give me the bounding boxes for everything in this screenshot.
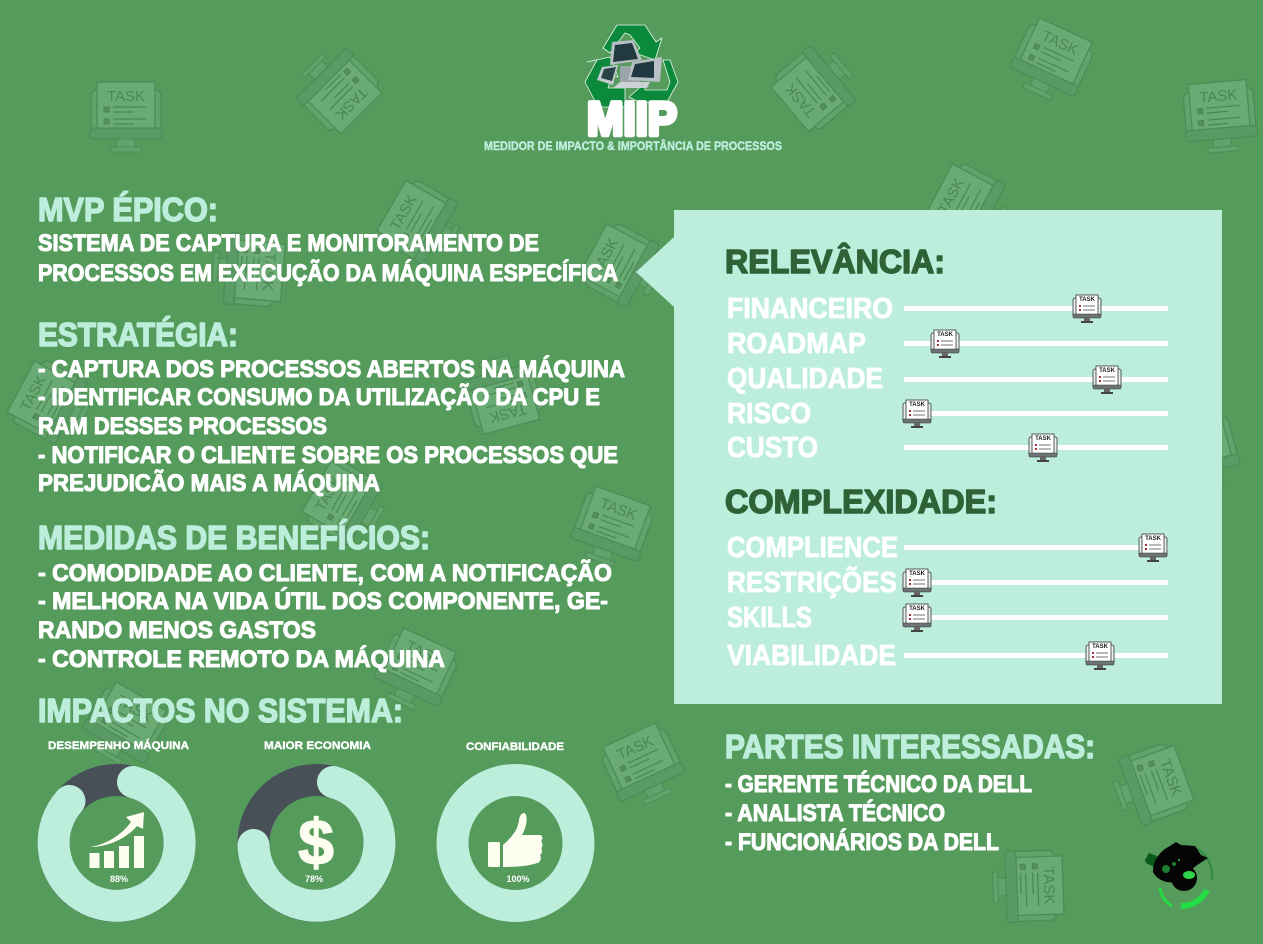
slider: custo: CUSTO [727, 432, 818, 464]
body text: - IDENTIFICAR CONSUMO DA UTILIZAÇÃO DA CPU E [38, 383, 600, 411]
slider: complience: COMPLIENCE [727, 532, 898, 564]
slider: financeiro [727, 293, 1168, 325]
slider: risco: TASK [909, 402, 926, 408]
background task icons: TASK [387, 192, 421, 233]
background task icons: TASK [614, 732, 656, 764]
background task icons: TASK [17, 373, 50, 414]
subtitle: MEDIDOR DE IMPACTO & IMPORTÂNCIA DE PROCESSOS [484, 138, 782, 153]
body text: PROCESSOS EM EXECUÇÃO DA MÁQUINA ESPECÍFICA [38, 259, 618, 287]
slider: complience [727, 532, 1168, 564]
slider: restrições [727, 565, 1168, 599]
ring [254, 780, 380, 906]
recycling arrows [585, 25, 678, 107]
panel background with pointer [636, 210, 1222, 704]
slider: custo: TASK [1035, 436, 1052, 442]
background task icons: TASK [487, 400, 528, 426]
value: 100% [506, 874, 530, 884]
body text: - NOTIFICAR O CLIENTE SOBRE OS PROCESSOS QUE [38, 442, 618, 469]
background task icons: TASK [107, 88, 145, 105]
body text [38, 559, 612, 673]
label: CONFIABILIDADE [466, 741, 564, 753]
body text: RANDO MENOS GASTOS [38, 617, 316, 644]
heading: MEDIDAS DE BENEFÍCIOS: [38, 519, 430, 556]
list: - ANALISTA TÉCNICO [725, 799, 945, 827]
value: 88% [110, 874, 128, 884]
slider: viabilidade: TASK [1092, 644, 1109, 650]
background task icons: TASK [258, 252, 279, 291]
icon: growth chart [90, 812, 144, 868]
body text: - CAPTURA DOS PROCESSOS ABERTOS NA MÁQUINA [38, 355, 625, 383]
slider: restrições: RESTRIÇÕES [727, 565, 897, 599]
slider: roadmap [727, 328, 1168, 360]
ring [54, 780, 180, 906]
slider: skills [727, 602, 1168, 634]
wordmark: MIIP [587, 92, 677, 145]
body text: SISTEMA DE CAPTURA E MONITORAMENTO DE [38, 230, 539, 257]
background task icons: TASK [1199, 86, 1238, 107]
background task icons: TASK [1039, 27, 1081, 59]
list: - FUNCIONÁRIOS DA DELL [725, 828, 999, 856]
donut: desempenho máquina [48, 739, 189, 906]
slider: roadmap: TASK [937, 332, 954, 338]
background task icons: TASK [782, 80, 820, 120]
section: partes interessadas [725, 728, 1095, 856]
body text: RAM DESSES PROCESSOS [38, 413, 327, 440]
body text [38, 355, 625, 497]
body text: - COMODIDADE AO CLIENTE, COM A NOTIFICAÇÃO [38, 559, 612, 587]
background task icons: TASK [1156, 757, 1185, 798]
slider: roadmap: ROADMAP [727, 328, 866, 360]
panel: relevância e complexidade [636, 210, 1222, 704]
background task icons: TASK [332, 84, 371, 123]
slider: risco: RISCO [727, 398, 811, 430]
slider: skills: SKILLS [727, 602, 812, 634]
background task icons: TASK [1039, 866, 1058, 905]
background task icons: TASK [403, 637, 445, 669]
icon: gaming mouse logo [1145, 842, 1212, 906]
slider: qualidade: QUALIDADE [727, 363, 883, 395]
slider: qualidade: TASK [1099, 368, 1116, 374]
heading: impactos no sistema: IMPACTOS NO SISTEMA: [38, 692, 403, 729]
label: MAIOR ECONOMIA [264, 740, 371, 752]
body text: - MELHORA NA VIDA ÚTIL DOS COMPONENTE, GE- [38, 587, 608, 615]
heading: MVP ÉPICO: [38, 191, 218, 228]
slider: viabilidade: VIABILIDADE [727, 640, 896, 672]
slider: financeiro: TASK [1079, 297, 1096, 303]
heading: relevância: RELEVÂNCIA: [725, 243, 945, 280]
heading: complexidade: COMPLEXIDADE: [725, 483, 997, 520]
section: estratégia [38, 316, 625, 497]
donut: maior economia [254, 740, 380, 906]
slider: financeiro: FINANCEIRO [727, 293, 893, 325]
slider: qualidade [727, 363, 1168, 395]
devices [597, 40, 662, 88]
logo [484, 25, 782, 153]
background task icons: TASK [935, 176, 968, 217]
body text: - CONTROLE REMOTO DA MÁQUINA [38, 645, 445, 673]
label: DESEMPENHO MÁQUINA [48, 739, 189, 752]
icon: thumbs up [488, 813, 542, 867]
slider: risco [727, 398, 1168, 430]
list [725, 770, 1032, 856]
body text [38, 230, 618, 287]
slider: skills: TASK [909, 606, 926, 612]
section: MVP épico [38, 191, 618, 287]
value: 78% [305, 874, 323, 884]
body text: PREJUDICÃO MAIS A MÁQUINA [38, 469, 380, 497]
background task icons: TASK [598, 495, 639, 524]
donut: confiabilidade [452, 741, 578, 906]
background task icons: TASK [589, 236, 622, 277]
slider: restrições: TASK [909, 571, 926, 577]
background task icons: TASK [312, 473, 346, 514]
slider: complience: TASK [1145, 536, 1162, 542]
slider: viabilidade [727, 640, 1168, 672]
section: medidas de benefícios [38, 519, 612, 673]
icon: dollar: $ [298, 806, 334, 878]
slider: custo [727, 432, 1168, 464]
background task icons: TASK [114, 692, 155, 726]
heading: ESTRATÉGIA: [38, 316, 238, 353]
ring [452, 780, 578, 906]
list: - GERENTE TÉCNICO DA DELL [725, 770, 1032, 798]
background task icons: TASK [1175, 419, 1216, 445]
heading: PARTES INTERESSADAS: [725, 728, 1095, 765]
